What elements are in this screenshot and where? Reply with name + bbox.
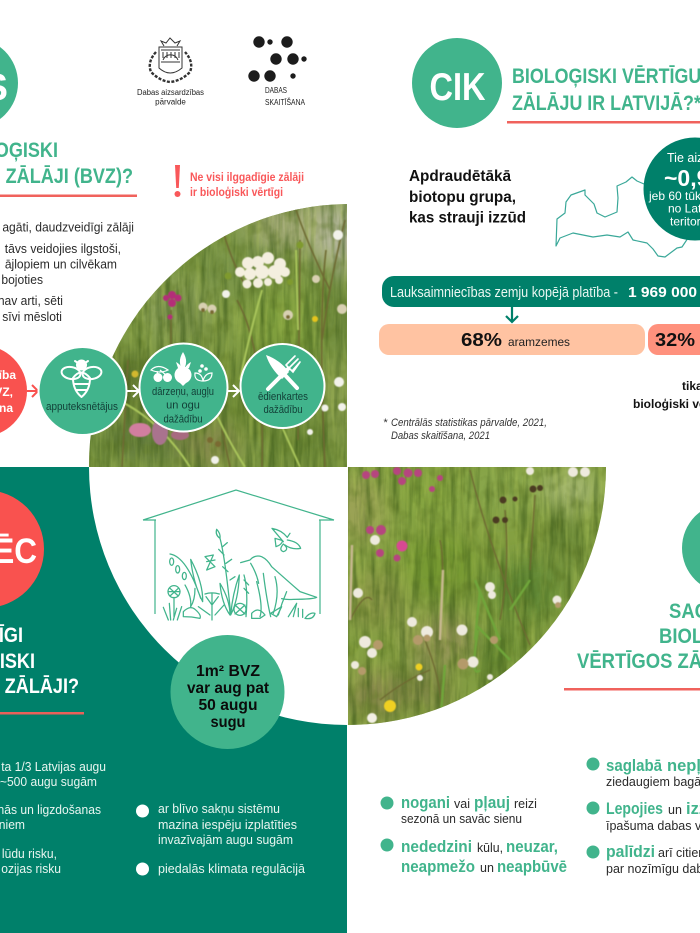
text block: actions left: sezonā un savāc sienu xyxy=(401,812,522,826)
circle: 1m2 fact: 50 augu xyxy=(198,697,258,714)
photo: meadow with white flower xyxy=(89,204,347,467)
circle: KĀPĒC xyxy=(0,490,44,608)
text block: actions left xyxy=(380,794,567,876)
text block: why reasons right: invazīvajām augu sugām xyxy=(158,832,293,847)
icon: cherries xyxy=(151,366,172,382)
footnote: Centrālās statistikas pārvalde, 2021, xyxy=(391,417,547,429)
text block: why reasons left: nās un ligzdošanas xyxy=(0,803,101,817)
circle: vegetables, fruit and berries xyxy=(140,344,228,432)
title: how much xyxy=(512,65,700,115)
text block: actions right: saglabā xyxy=(606,757,663,775)
text block: actions left: nogani xyxy=(401,794,450,812)
circle: pollinators: apputeksnētājus xyxy=(46,401,118,413)
text block: most threatened xyxy=(409,168,526,226)
text block: actions left: vai xyxy=(454,797,470,811)
bar: arable land 68%: aramzemes xyxy=(508,335,570,349)
text block: why reasons left: ta 1/3 Latvijas augu xyxy=(1,760,106,774)
logo: Dabas aizsardzības pārvalde: pārvalde xyxy=(155,98,186,106)
logo: Dabas skaitīšana xyxy=(248,36,307,107)
text block: why reasons right: piedalās klimata regulācijā xyxy=(158,861,306,876)
text block: actions right: un xyxy=(668,803,682,817)
title: how much: ZĀLĀJU IR LATVIJĀ?* xyxy=(512,92,700,115)
footnote xyxy=(383,417,547,442)
callout: warning: Ne visi ilggadīgie zālāji xyxy=(190,170,304,184)
text block: definition: agāti, daudzveidīgi zālāji xyxy=(2,220,134,235)
text block: actions right: Lepojies xyxy=(606,800,663,818)
arrow: red xyxy=(27,385,38,397)
callout: warning xyxy=(174,165,304,199)
arrow: down xyxy=(506,307,518,322)
title: how to preserve xyxy=(577,600,700,673)
title: what are BVZ xyxy=(0,139,133,188)
text block: definition: sīvi mēsloti xyxy=(2,310,62,324)
circle: pollinators xyxy=(38,347,126,435)
icon: beet xyxy=(174,352,192,386)
logo: Dabas aizsardzības pārvalde xyxy=(137,38,204,106)
circle: KAS xyxy=(0,38,18,128)
chain: biodiversity to menu xyxy=(0,344,324,437)
icon: sprout xyxy=(195,364,212,381)
text block: why reasons right: mazina iespēju izplatīties xyxy=(158,817,297,832)
circle: vegetables, fruit and berries: un ogu xyxy=(166,400,200,412)
text block: actions right xyxy=(586,757,700,876)
circle: 1m2 fact: 1m² BVZ xyxy=(196,663,261,680)
text block: actions left: un xyxy=(480,861,494,875)
bar: total agricultural land xyxy=(382,276,700,307)
bar: arable land 68%: 68% xyxy=(461,329,502,350)
panel: why heading xyxy=(0,490,84,714)
red divider xyxy=(0,194,137,197)
arrow: white xyxy=(127,385,139,397)
circle: vegetables, fruit and berries: dažādību xyxy=(164,414,202,426)
footnote: * xyxy=(383,417,388,429)
circle: vegetables, fruit and berries: dārzeņu, augļu xyxy=(152,386,214,398)
icon: bee xyxy=(61,360,102,397)
circle: menu variety: dažādību xyxy=(264,404,302,416)
text block: actions left: pļauj xyxy=(474,794,510,812)
title: how much: BIOLOĢISKI VĒRTĪGU xyxy=(512,65,700,88)
bar: 32%: 32% xyxy=(655,329,695,350)
text block: why reasons left: ~500 augu sugām xyxy=(0,775,97,789)
map: Latvia outline xyxy=(556,177,688,257)
bar: total agricultural land: 1 969 000 xyxy=(628,284,697,301)
title: what are BVZ: ZĀLĀJI (BVZ)? xyxy=(6,165,133,188)
footnote: Dabas skaitīšana, 2021 xyxy=(391,430,490,442)
text block: most threatened: biotopu grupa, xyxy=(409,189,516,206)
panel: why (green) xyxy=(0,467,347,933)
circle: red start xyxy=(0,345,27,437)
bar: 32% xyxy=(648,324,700,355)
callout: warning: ir bioloģiski vērtīgi xyxy=(190,185,283,199)
text block: definition: tāvs veidojies ilgstoši, xyxy=(5,242,121,256)
circle: preserve xyxy=(682,503,700,593)
callout: area circle xyxy=(644,138,700,240)
text block: why reasons left xyxy=(0,760,106,876)
logo: Dabas aizsardzības pārvalde: Dabas aizsardzības xyxy=(137,88,204,97)
circle: CIK: CIK xyxy=(430,66,486,109)
text block: actions right: ziedaugiem bagā xyxy=(606,775,700,789)
circle: menu variety xyxy=(240,344,324,428)
text block: definition: bojoties xyxy=(1,273,43,287)
text block: actions right: nepļ xyxy=(667,757,700,775)
bar: arable land 68% xyxy=(379,324,645,355)
icon: knife and fork xyxy=(266,355,300,389)
text block: mapped as valuable xyxy=(633,379,700,411)
title: why important xyxy=(0,624,79,698)
circle: 1m2 fact: sugu xyxy=(210,714,246,731)
logo: Dabas skaitīšana: SKAITĪŠANA xyxy=(265,98,306,107)
text block: why reasons left: ozijas risku xyxy=(1,862,61,876)
logo: Dabas skaitīšana: DABAS xyxy=(265,86,287,95)
text block: definition: ājlopiem un cilvēkam xyxy=(5,257,117,272)
circle: 1m2 fact xyxy=(170,635,284,749)
red divider xyxy=(0,712,84,714)
text block: actions left: neapbūvē xyxy=(497,858,567,876)
text block: actions left: kūlu, xyxy=(477,841,503,855)
text block: actions left: neuzar, xyxy=(506,838,558,856)
text block: most threatened: Apdraudētākā xyxy=(409,168,511,185)
title: how to preserve: VĒRTĪGOS ZĀ xyxy=(577,650,700,673)
text block: actions left: reizi xyxy=(514,797,537,811)
photo: meadow with clover xyxy=(335,465,610,727)
circle: 1m2 fact: var aug pat xyxy=(187,680,269,697)
circle: menu variety: ēdienkartes xyxy=(258,391,308,403)
text block: why reasons right: ar blīvo sakņu sistēmu xyxy=(158,801,280,816)
red divider xyxy=(564,688,700,690)
red divider xyxy=(507,121,700,124)
text block: most threatened: kas strauji izzūd xyxy=(409,210,526,226)
arrow: white xyxy=(227,385,239,397)
circle: CIK xyxy=(412,38,502,128)
text block: why reasons left: lūdu risku, xyxy=(2,847,57,861)
bar: total agricultural land: Lauksaimniecības zemju kopējā platība - xyxy=(390,285,618,301)
text block: actions right: palīdzi xyxy=(606,843,655,861)
text block: actions left: nededzini xyxy=(401,838,472,856)
text block: actions left: neapmežo xyxy=(401,858,475,876)
text block: definition xyxy=(0,220,134,324)
panel: preserve heading xyxy=(564,503,700,690)
panel: how much heading xyxy=(412,38,700,128)
illustration: meadow in a house xyxy=(143,490,334,620)
panel: what heading xyxy=(0,38,137,197)
text block: why reasons right xyxy=(136,801,306,876)
